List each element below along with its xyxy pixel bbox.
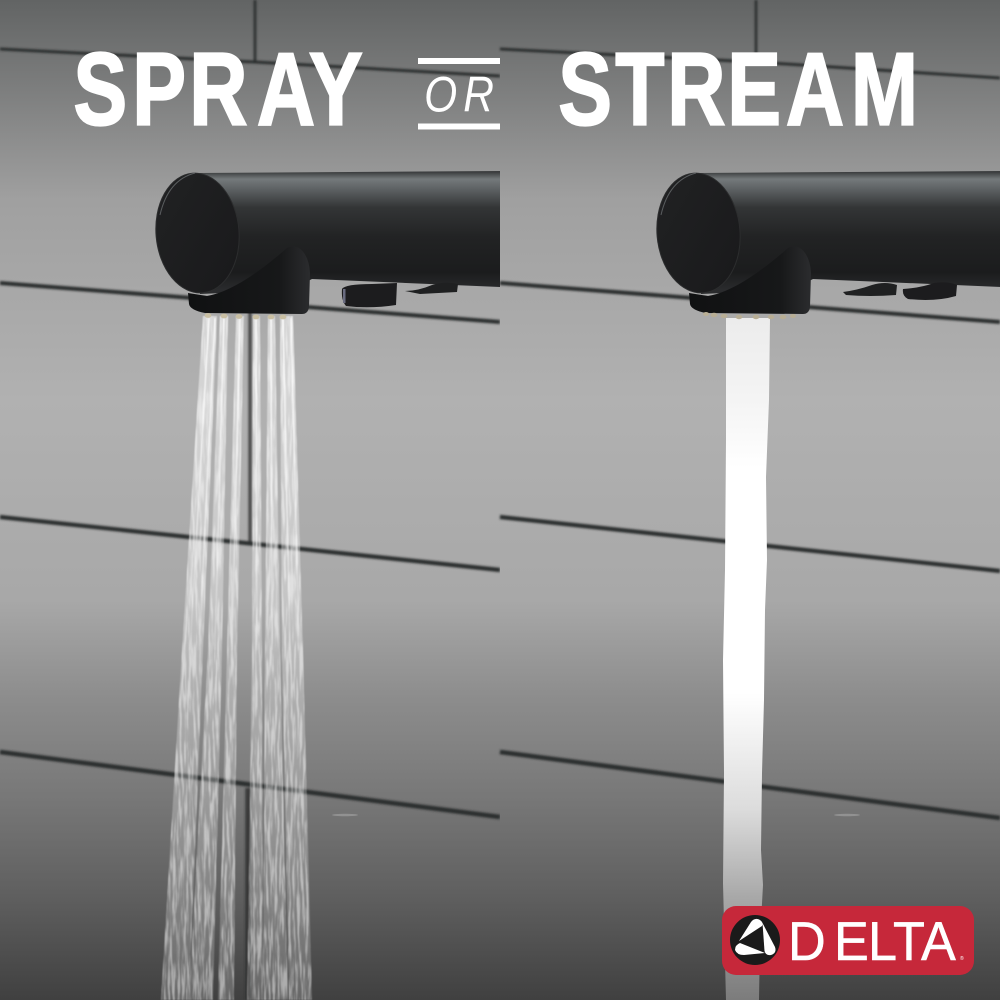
heading: or with rules xyxy=(418,58,500,130)
buttons: spray side xyxy=(342,283,458,307)
icon: Delta triangle mark xyxy=(730,915,780,965)
heading: spray: SPRAY xyxy=(73,31,363,147)
Delta logo badge xyxy=(722,906,974,975)
registered mark: ® xyxy=(960,955,964,962)
faucet: stream side xyxy=(652,170,1000,319)
right panel background wall xyxy=(500,0,1000,1000)
wall reflection glint xyxy=(332,814,358,816)
heading: stream: STREAM xyxy=(558,31,918,147)
wall reflection glint xyxy=(834,814,860,816)
nozzles stream side xyxy=(703,312,796,319)
faucet: spray side xyxy=(151,170,500,319)
nozzles spray side xyxy=(205,313,286,319)
heading: or with rules: OR xyxy=(424,66,494,122)
left panel background wall xyxy=(0,0,500,1000)
logo wordmark: DELTA xyxy=(788,911,956,972)
spray water streams xyxy=(161,316,312,1000)
stream of water xyxy=(723,318,770,1000)
buttons: stream side xyxy=(843,282,957,300)
